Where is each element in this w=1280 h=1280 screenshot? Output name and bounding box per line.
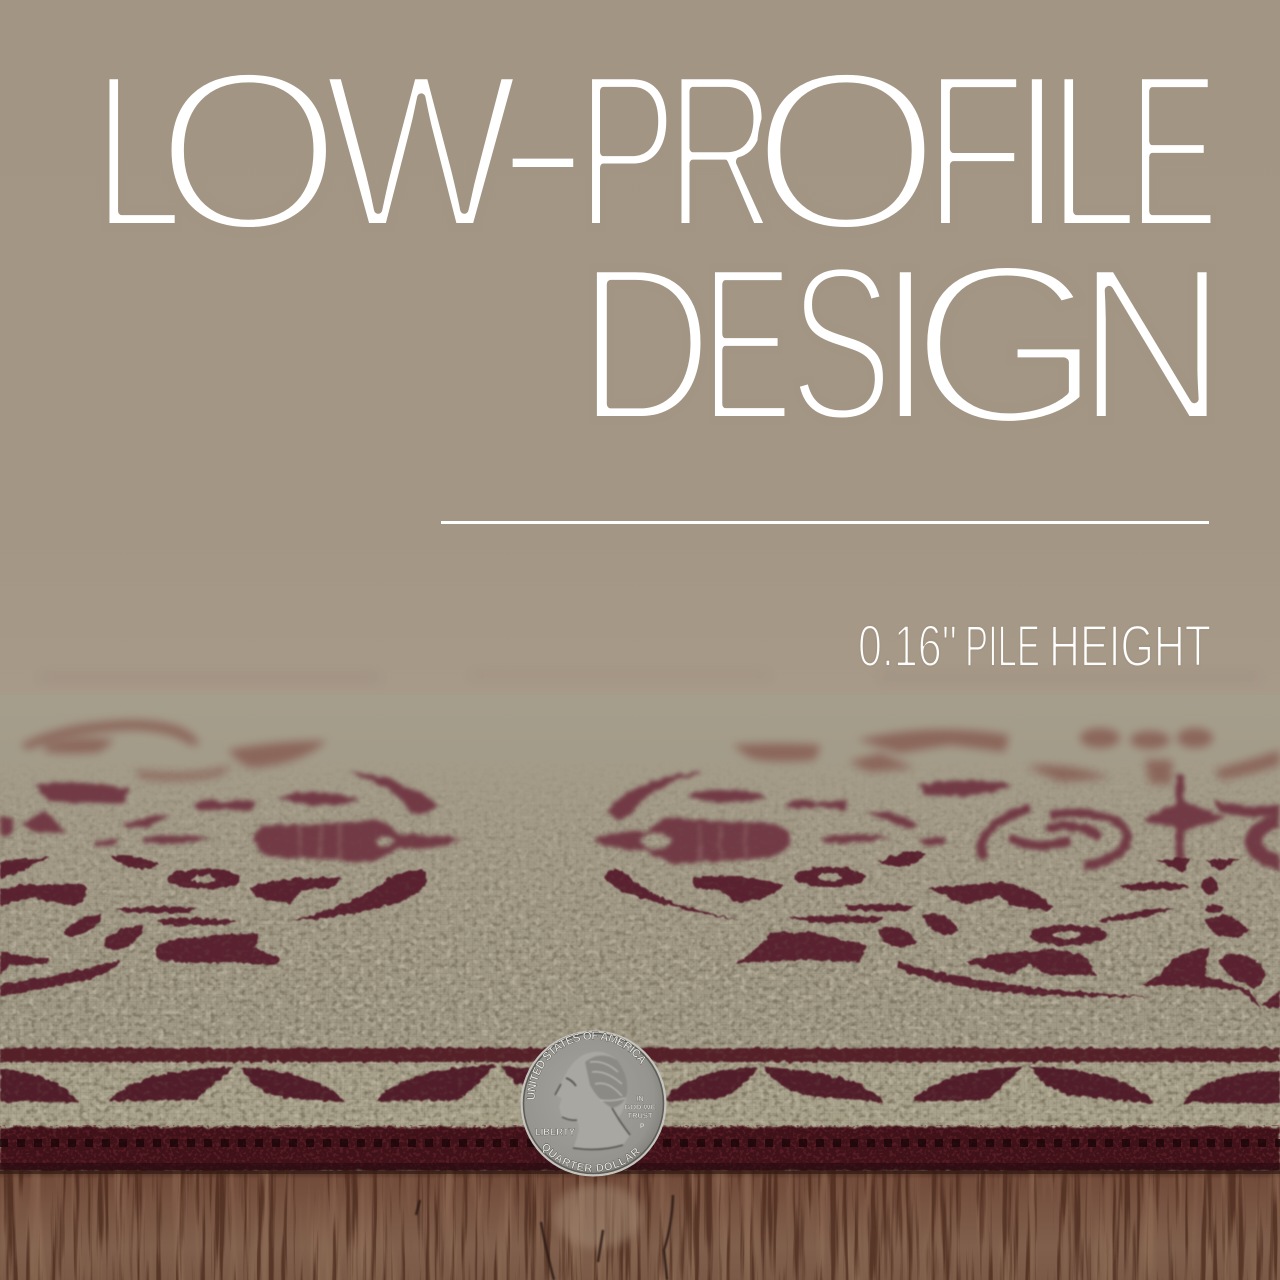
rug pattern: mid-distance motifs [0,772,1280,870]
rug surface [0,695,1280,1135]
title: first line: P [577,28,677,276]
coin legend: motto: GOD WE [624,1102,656,1112]
title: first line: L [1048,28,1138,276]
title: second line: I [876,220,935,468]
border stripe [0,1048,1280,1062]
rug pattern: far blurred motifs [20,720,1280,784]
background panel [0,0,1280,700]
subheading: pile height: HEIGHT [1049,614,1211,679]
coin legend: bottom: QUARTER DOLLAR [542,1143,640,1172]
wood floor [0,1170,1280,1280]
title: first line: W [323,28,519,276]
divider rule [441,521,1209,524]
border petals [0,1065,1280,1103]
coin legend: liberty: LIBERTY [535,1127,576,1138]
rug pattern: near sharp motifs, right [605,852,1280,1010]
title: first line: O [155,23,343,279]
coin legend: top: UNITED STATES OF AMERICA [526,1031,646,1100]
title: second line: E [701,220,793,468]
title: second line: G [909,216,1104,473]
title: second line: N [1075,220,1228,468]
title: first line: E [1128,28,1219,276]
title: first line: R [666,28,776,276]
title: second line: S [789,220,893,468]
lighter border strip of rug [0,1062,1280,1130]
fabric weave texture [0,796,1280,1148]
subheading: pile height: 0.16" [858,614,957,679]
title: first line: O [751,23,941,279]
title: second line: D [578,220,713,468]
title: first line: F [924,28,1026,276]
title: first line: L [93,28,183,276]
coin mint mark: P [640,1123,644,1130]
icon: quarter dollar coin [520,1030,666,1176]
faint fabric grain over printed pattern [0,864,1279,1125]
title: first line: I [1010,28,1064,276]
title: first line: - [493,22,592,270]
blurred far edge of rug [40,672,1260,681]
rug pattern: near sharp motifs, left [0,855,426,996]
coin bust [555,1052,630,1149]
subheading: pile height: PILE [965,614,1040,679]
rug bound edge [0,1127,1280,1171]
coin legend: motto: TRUST [628,1111,653,1120]
coin legend: motto: IN [636,1094,644,1103]
